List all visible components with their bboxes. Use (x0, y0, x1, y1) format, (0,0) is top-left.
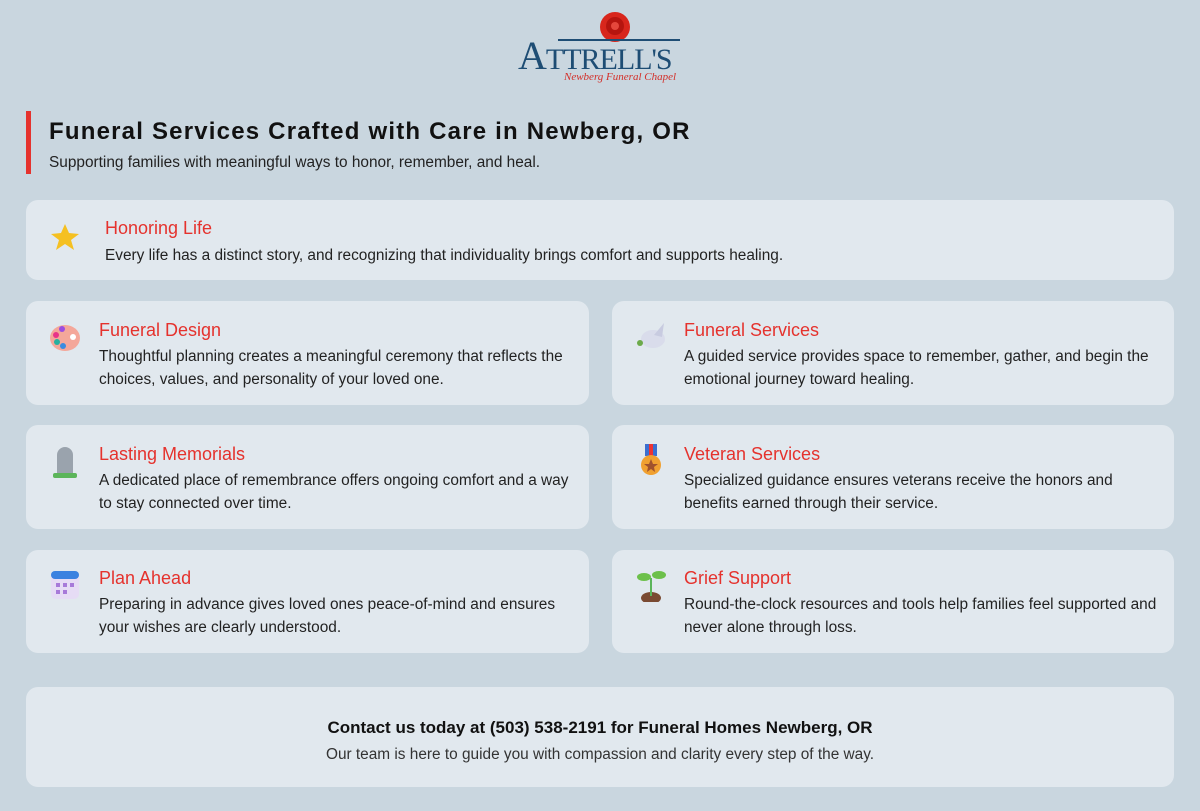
title (26, 111, 691, 174)
icon: medal (641, 444, 661, 475)
panel: veteran services: Veteran Services (684, 444, 820, 464)
panel: grief support: Round-the-clock resources and tools help families feel supported and never alone through loss. (684, 596, 1156, 636)
logo: Newberg Funeral Chapel (564, 71, 676, 83)
title: Supporting families with meaningful ways to honor, remember, and heal. (49, 154, 540, 171)
panel: veteran services: Specialized guidance ensures veterans receive the honors and benefits earned through their service. (684, 472, 1113, 512)
panel: funeral design: Thoughtful planning creates a meaningful ceremony that reflects the choices, values, and personality of your loved one. (99, 348, 563, 388)
panel: honoring life (26, 200, 1174, 280)
panel: plan ahead: Plan Ahead (99, 568, 191, 588)
title: Funeral Services Crafted with Care in Newberg, OR (49, 118, 691, 145)
panel: honoring life: Honoring Life (105, 218, 212, 238)
icon: rose (600, 12, 630, 42)
icon: calendar (51, 571, 79, 599)
panel: lasting memorials: A dedicated place of remembrance offers ongoing comfort and a way to stay connected over time. (99, 472, 568, 512)
panel: contact: Contact us today at (503) 538-2191 for Funeral Homes Newberg, OR (327, 718, 873, 737)
icon: sprout (637, 571, 666, 602)
panel: plan ahead: Preparing in advance gives loved ones peace-of-mind and ensures your wishes are clearly understood. (99, 596, 555, 636)
logo: ATTRELL'S (518, 33, 672, 78)
panel: honoring life: Every life has a distinct story, and recognizing that individuality brings comfort and supports healing. (105, 247, 783, 264)
icon: headstone (53, 447, 77, 478)
logo (518, 12, 680, 83)
panel: funeral design: Funeral Design (99, 320, 221, 340)
icon: star (51, 224, 79, 250)
panel: veteran services (612, 425, 1174, 529)
icon: palette (50, 325, 80, 351)
panel: grief support: Grief Support (684, 568, 791, 588)
panel: funeral services: A guided service provides space to remember, gather, and begin the emotional journey toward healing. (684, 348, 1149, 388)
panel: contact: Our team is here to guide you with compassion and clarity every step of the way. (326, 746, 874, 763)
panel: lasting memorials (26, 425, 589, 529)
icon: dove (637, 323, 665, 348)
panel: lasting memorials: Lasting Memorials (99, 444, 245, 464)
panel: funeral services (612, 301, 1174, 405)
panel: contact (26, 687, 1174, 787)
panel: grief support (612, 550, 1174, 653)
panel: plan ahead (26, 550, 589, 653)
panel: funeral services: Funeral Services (684, 320, 819, 340)
panel: funeral design (26, 301, 589, 405)
